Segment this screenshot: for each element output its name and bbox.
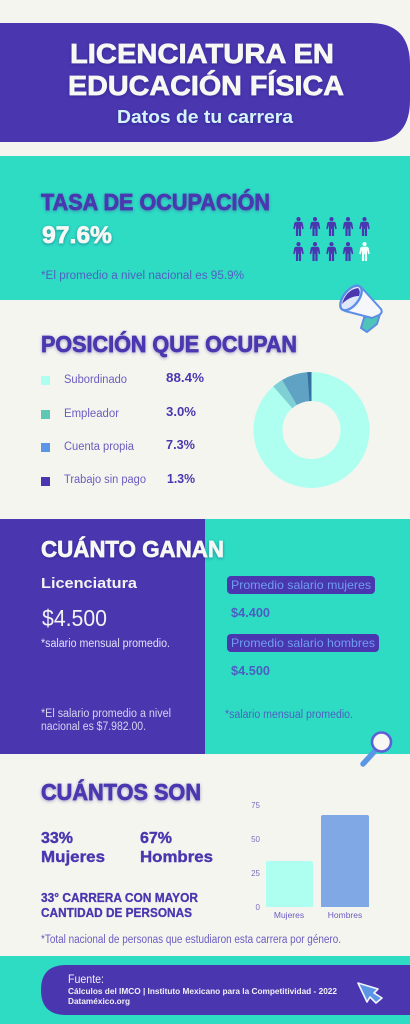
legend: trabajo sin pago: 1.3% <box>167 471 195 486</box>
legend: trabajo sin pago: Trabajo sin pago <box>64 474 146 486</box>
legend: empleador: 3.0% <box>166 404 196 419</box>
note: salario mensual derecha: *salario mensual promedio. <box>225 709 353 721</box>
stat: salario mujeres: $4.400 <box>231 606 270 620</box>
note: salario nacional: nacional es $7.982.00. <box>41 721 146 733</box>
text: ranking de carrera: CANTIDAD DE PERSONAS <box>41 906 192 920</box>
stat: mujeres: 33% <box>41 830 73 847</box>
legend: empleador: Empleador <box>64 408 119 420</box>
text: ranking de carrera <box>41 891 198 920</box>
note: salario mensual izquierda: *salario mensual promedio. <box>41 638 170 650</box>
stat: hombres: 67% <box>140 830 172 847</box>
legend: empleador <box>41 404 196 420</box>
legend: cuenta propia: Cuenta propia <box>64 441 135 453</box>
label: licenciatura: Licenciatura <box>41 575 138 592</box>
note: salario nacional: *El salario promedio a nivel <box>41 708 171 720</box>
legend: subordinado: 88.4% <box>166 370 204 385</box>
bar chart: Hombres <box>328 910 362 920</box>
panel: posición que ocupan <box>41 330 355 486</box>
heading: tasa de ocupación: TASA DE OCUPACIÓN <box>41 188 270 215</box>
heading: cuánto ganan: CUÁNTO GANAN <box>41 535 224 562</box>
subtitle: Datos de tu carrera <box>117 107 294 127</box>
icon: people pictogram <box>293 217 370 261</box>
text: fuente: Fuente: <box>68 974 104 986</box>
stat: salario hombres: $4.500 <box>231 664 270 678</box>
bar chart <box>251 801 369 920</box>
text: fuente: Dataméxico.org <box>68 996 130 1006</box>
title: LICENCIATURA EN <box>70 38 334 69</box>
stat: hombres: Hombres <box>140 849 213 866</box>
panel: tasa de ocupación <box>0 156 410 300</box>
icon: magnifying glass <box>363 732 391 764</box>
legend: trabajo sin pago <box>41 471 195 486</box>
panel: cuántos son <box>41 778 369 946</box>
label: promedio salario hombres: Promedio salario hombres <box>231 636 375 650</box>
icon: cursor <box>358 983 382 1003</box>
bar chart: 25 <box>251 869 261 878</box>
note: total nacional: *Total nacional de personas que estudiaron esta carrera por género. <box>41 934 341 946</box>
title <box>68 38 344 101</box>
heading: cuántos son: CUÁNTOS SON <box>41 778 201 805</box>
legend: subordinado: Subordinado <box>64 374 127 386</box>
bar chart: Mujeres <box>274 910 304 920</box>
legend: cuenta propia: 7.3% <box>166 437 195 452</box>
stat: 97.6%: 97.6% <box>42 222 112 249</box>
text: ranking de carrera: 33° CARRERA CON MAYOR <box>41 891 198 905</box>
label: promedio salario mujeres: Promedio salario mujeres <box>231 578 371 592</box>
title: EDUCACIÓN FÍSICA <box>68 70 344 101</box>
stat: salario licenciatura: $4.500 <box>42 605 107 631</box>
donut chart <box>268 386 355 474</box>
bar chart: 0 <box>256 903 261 912</box>
text: fuente <box>68 974 337 1006</box>
stat: mujeres <box>41 830 105 866</box>
panel: fuente <box>0 956 410 1024</box>
stat: hombres <box>140 830 213 866</box>
stat: mujeres: Mujeres <box>41 849 105 866</box>
icon: megaphone <box>336 282 382 332</box>
bar chart: 75 <box>251 801 261 810</box>
bar chart: 50 <box>251 835 261 844</box>
legend: subordinado <box>41 370 204 386</box>
text: fuente: Cálculos del IMCO | Instituto Mexicano para la Competitividad - 2022 <box>68 986 337 996</box>
note: promedio nacional: *El promedio a nivel nacional es 95.9% <box>41 270 244 282</box>
panel: cuánto ganan <box>0 519 410 754</box>
note: salario nacional <box>41 708 171 733</box>
legend: cuenta propia <box>41 437 195 453</box>
panel: header <box>0 23 410 142</box>
heading: posición que ocupan: POSICIÓN QUE OCUPAN <box>41 330 297 357</box>
